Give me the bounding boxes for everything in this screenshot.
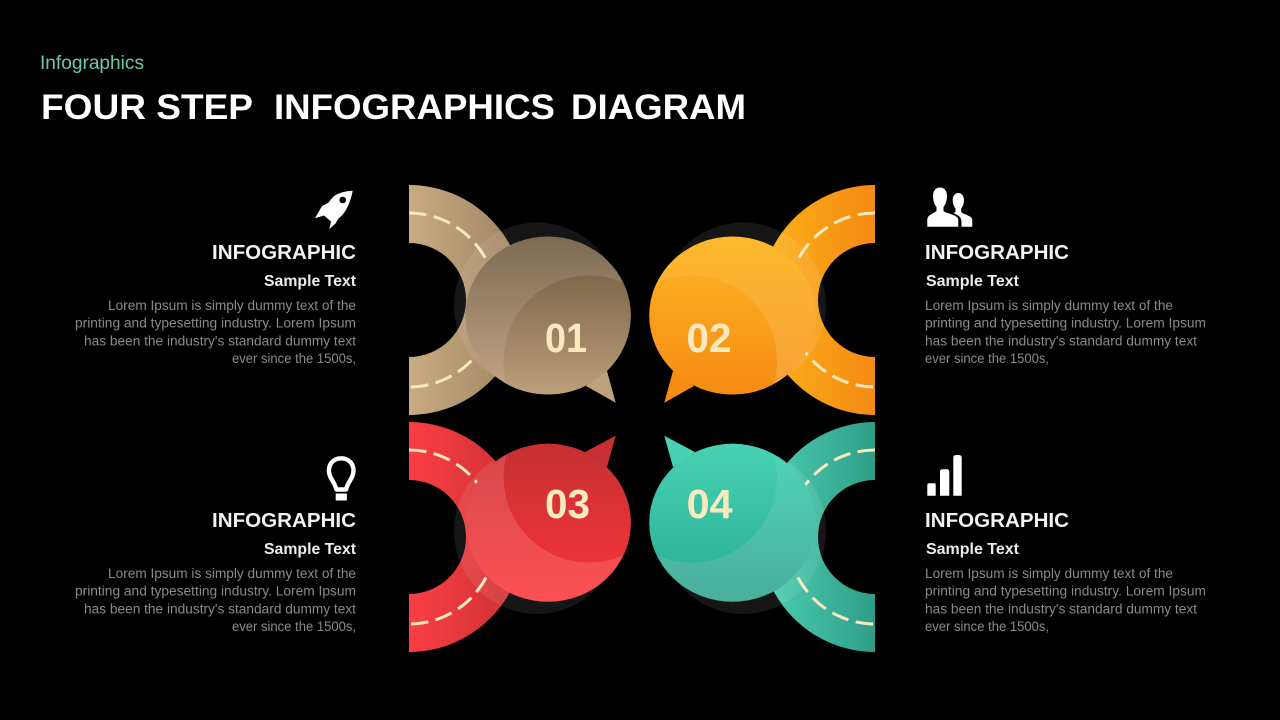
body 04: [925, 566, 1206, 634]
text block: step 04: [925, 510, 1206, 634]
number 04: 04: [687, 481, 733, 527]
heading 01: INFOGRAPHIC: [212, 242, 356, 264]
title: [41, 88, 746, 127]
icon: bar chart: [927, 455, 962, 496]
icon: rocket: [315, 191, 353, 229]
dashed path 02: [788, 213, 875, 387]
step 01 graphic: [409, 185, 631, 415]
body 03: has been the industry's standard dummy text: [84, 601, 356, 616]
icon: light bulb: [329, 458, 354, 500]
bubble shadow 01: [454, 222, 620, 388]
speech bubble 01: [465, 236, 631, 403]
text block: step 03: [75, 510, 357, 634]
ring 03: [409, 422, 524, 652]
body 02: ever since the 1500s,: [925, 351, 1049, 366]
text block: step 01: [75, 242, 357, 366]
step 02 graphic: [649, 185, 875, 415]
ring 01: [409, 185, 524, 415]
subheading 02: Sample Text: [926, 273, 1020, 290]
body 01: Lorem Ipsum is simply dummy text of the: [108, 298, 356, 313]
body 03: ever since the 1500s,: [232, 619, 356, 634]
subheading 04: Sample Text: [926, 541, 1020, 558]
heading 02: INFOGRAPHIC: [925, 242, 1069, 264]
body 04: printing and typesetting industry. Lorem Ipsum: [925, 584, 1206, 599]
dashed path 01: [409, 213, 496, 387]
body 04: ever since the 1500s,: [925, 619, 1049, 634]
bubble shadow 04: [660, 448, 826, 614]
body 04: has been the industry's standard dummy text: [925, 601, 1197, 616]
ring 02: [760, 185, 875, 415]
body 02: has been the industry's standard dummy text: [925, 333, 1197, 348]
dashed path 04: [788, 450, 875, 624]
body 01: ever since the 1500s,: [232, 351, 356, 366]
body 02: [925, 298, 1206, 366]
bubble shadow 03: [454, 448, 620, 614]
body 02: printing and typesetting industry. Lorem Ipsum: [925, 316, 1206, 331]
ring 04: [760, 422, 875, 652]
eyebrow label: Infographics: [40, 53, 144, 74]
number 01: 01: [545, 315, 587, 361]
body 03: [75, 566, 356, 634]
subheading 01: Sample Text: [264, 273, 357, 290]
title: FOUR STEP: [41, 88, 253, 127]
bubble shadow 02: [660, 222, 826, 388]
body 01: [75, 298, 356, 366]
step 03 graphic: [409, 422, 631, 652]
text block: step 02: [925, 242, 1206, 366]
title: DIAGRAM: [571, 88, 746, 127]
dashed path 03: [409, 450, 496, 624]
speech bubble 02: [649, 236, 816, 403]
step 04 graphic: [649, 422, 875, 652]
body 01: has been the industry's standard dummy text: [84, 333, 356, 348]
body 04: Lorem Ipsum is simply dummy text of the: [925, 566, 1173, 581]
subheading 03: Sample Text: [264, 541, 357, 558]
body 01: printing and typesetting industry. Lorem Ipsum: [75, 316, 356, 331]
body 03: Lorem Ipsum is simply dummy text of the: [108, 566, 356, 581]
heading 03: INFOGRAPHIC: [212, 510, 356, 532]
number 02: 02: [686, 315, 732, 361]
speech bubble 04: [649, 436, 812, 602]
speech bubble 03: [466, 436, 631, 602]
title: INFOGRAPHICS: [274, 88, 555, 127]
icon: people: [927, 188, 972, 227]
heading 04: INFOGRAPHIC: [925, 510, 1069, 532]
number 03: 03: [545, 481, 590, 527]
body 03: printing and typesetting industry. Lorem Ipsum: [75, 584, 356, 599]
body 02: Lorem Ipsum is simply dummy text of the: [925, 298, 1173, 313]
